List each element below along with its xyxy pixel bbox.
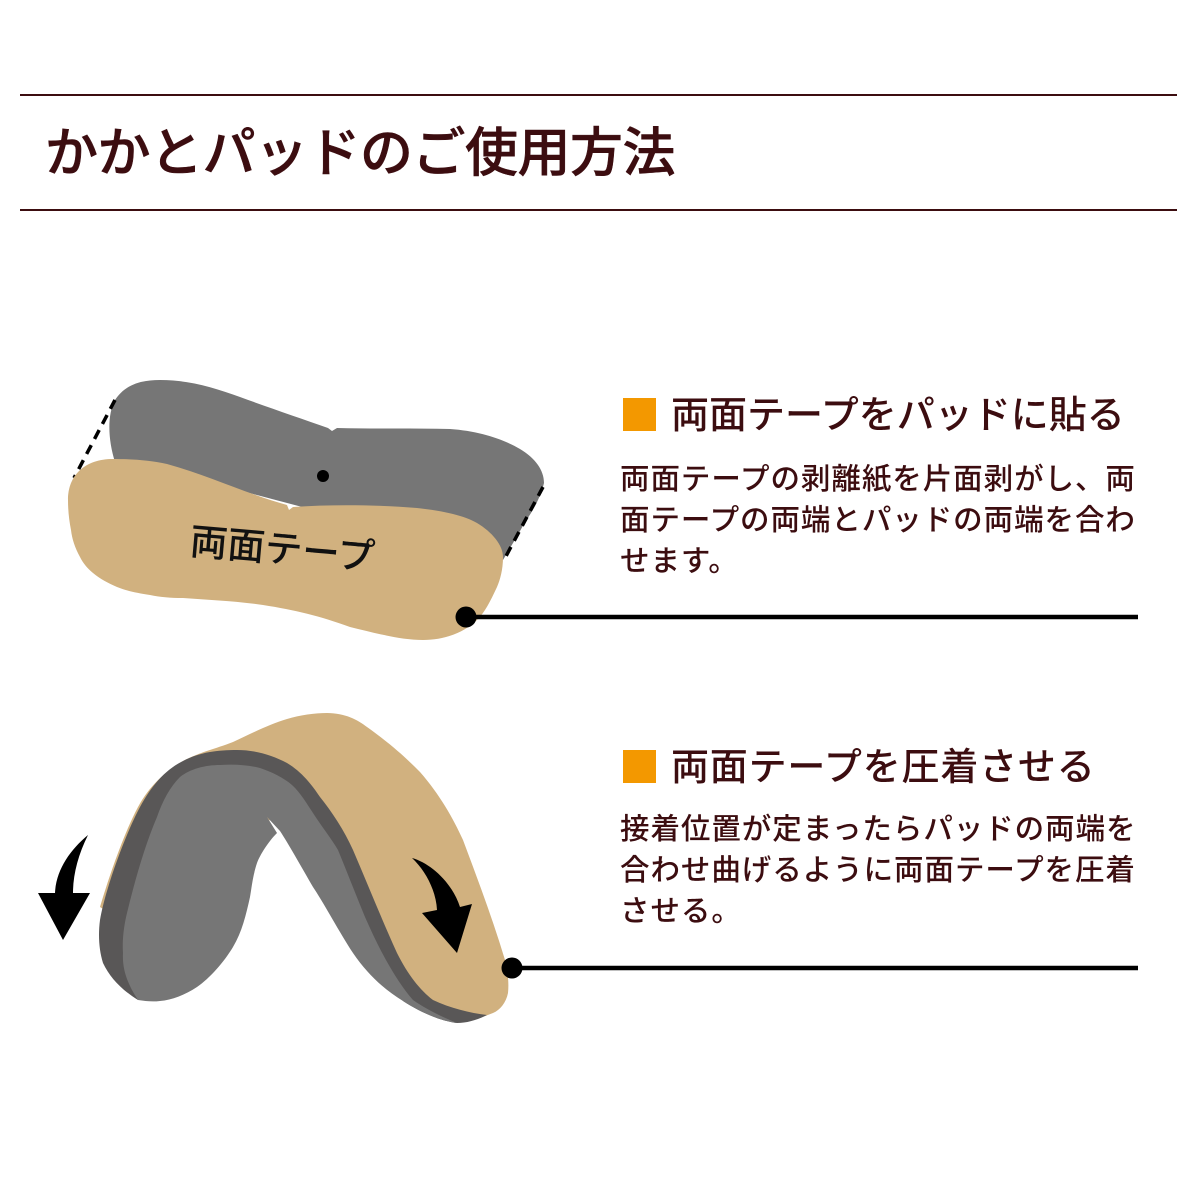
illustration: bent pad	[38, 713, 508, 1023]
tape outer	[100, 713, 508, 1018]
step 1 text	[620, 463, 1136, 578]
leader line 2	[502, 958, 1138, 978]
gray pad face	[123, 765, 457, 1023]
step 1 text: 両面テープの剥離紙を片面剥がし、両	[620, 463, 1136, 496]
step 2 text	[620, 813, 1136, 928]
leader line 1	[456, 606, 1138, 628]
step 2 text: させる。	[620, 895, 742, 928]
dashed guide lines	[74, 400, 543, 558]
step 1 text: 面テープの両端とパッドの両端を合わ	[620, 504, 1136, 537]
orange square	[623, 750, 656, 783]
tape label: 両面テープ	[188, 520, 377, 578]
step 1 text: せます。	[620, 545, 739, 578]
step 2 text: 合わせ曲げるように両面テープを圧着	[620, 854, 1136, 887]
tape	[68, 459, 503, 640]
right arrow	[412, 858, 472, 953]
gray pad	[109, 380, 544, 560]
step 1 heading: 両面テープをパッドに貼る	[671, 395, 1125, 437]
dark pad edge	[99, 750, 487, 1023]
illustration: pad with double-sided tape	[68, 380, 544, 640]
pad centre dot	[317, 470, 329, 482]
left arrow	[38, 835, 90, 940]
step 2 text: 接着位置が定まったらパッドの両端を	[620, 813, 1136, 846]
title: かかとパッドのご使用方法	[45, 124, 675, 183]
orange square	[623, 398, 656, 431]
title band	[20, 94, 1177, 211]
step 2 heading: 両面テープを圧着させる	[671, 747, 1096, 789]
